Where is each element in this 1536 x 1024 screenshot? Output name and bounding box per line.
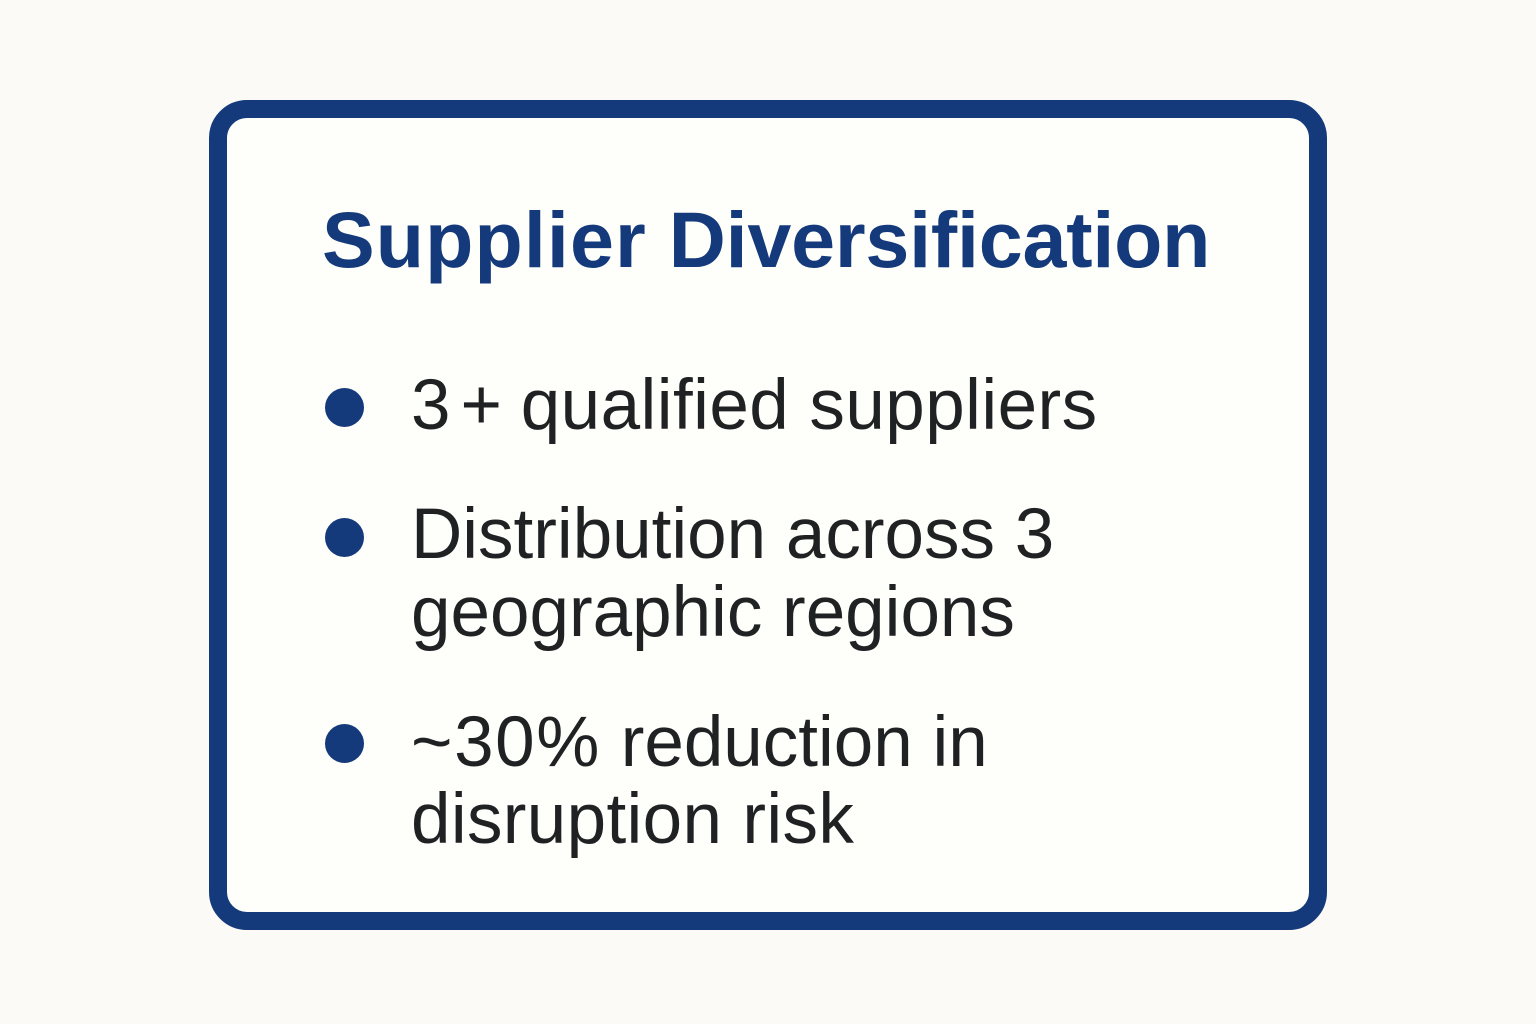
text: qualified suppliers: 3+ qualified suppliers (411, 366, 1098, 445)
icon: bullet 2 (325, 518, 364, 557)
title: Supplier Diversification (322, 195, 1210, 284)
icon: bullet 1 (325, 388, 364, 427)
text: distribution across regions: geographic regions (411, 573, 1015, 652)
panel: supplier diversification card (209, 100, 1327, 930)
text: distribution across regions: Distribution across 3 (411, 495, 1054, 574)
text: disruption risk reduction: disruption risk (411, 780, 854, 859)
text: distribution across regions (411, 495, 1054, 652)
text: disruption risk reduction: ~30% reduction in (411, 703, 988, 782)
icon: bullet 3 (325, 724, 364, 763)
text: disruption risk reduction (411, 703, 988, 859)
